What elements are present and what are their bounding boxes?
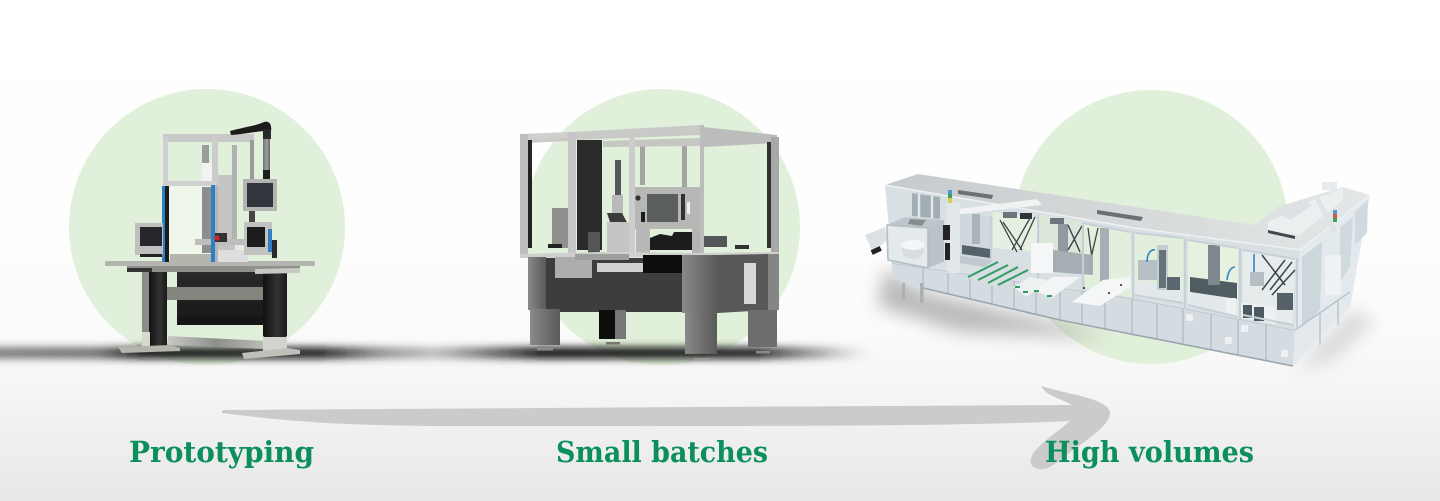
base cabinets <box>892 263 1295 366</box>
signal tower right <box>1315 197 1337 234</box>
right monitor <box>244 222 277 258</box>
machine base <box>528 254 779 313</box>
progress arrow <box>222 386 1110 469</box>
high volume line left shadow <box>878 268 1110 338</box>
window frames <box>958 211 1297 330</box>
rear left windows <box>912 193 940 219</box>
table plate <box>520 252 779 258</box>
green circle: prototyping <box>69 89 345 365</box>
feeder box <box>887 217 943 268</box>
high volume line right shadow <box>1296 308 1375 368</box>
label: Small batches: Small batches <box>556 435 768 469</box>
signal tower left <box>943 190 960 273</box>
equipment on table <box>636 228 727 253</box>
desk base <box>118 265 300 359</box>
label: High volumes: High volumes <box>1045 435 1254 469</box>
spindle <box>588 160 630 253</box>
front wall <box>885 185 1300 330</box>
left monitor <box>135 223 163 257</box>
roof edge highlight <box>885 185 1370 250</box>
control panel <box>633 187 700 229</box>
desk top <box>105 261 315 266</box>
label: Prototyping: Prototyping <box>129 435 314 469</box>
emergency stop button <box>214 233 227 242</box>
roof <box>885 174 1370 250</box>
green circle: small batches <box>524 89 800 365</box>
floor shadow band <box>0 347 870 359</box>
green circle: high volumes <box>1014 90 1288 364</box>
roof control strips <box>958 190 1143 221</box>
white carton stack <box>1031 243 1053 273</box>
support legs <box>902 283 924 303</box>
process windows <box>960 212 1295 325</box>
glass frame <box>162 134 255 262</box>
upper monitor <box>243 179 277 211</box>
left grey box <box>552 208 569 248</box>
prototyping workstation <box>105 122 315 359</box>
roof mounted unit <box>1268 182 1343 239</box>
dark tower <box>577 140 602 250</box>
fume extraction arm <box>230 122 271 223</box>
small batch machine <box>520 125 779 360</box>
white outfeed tray <box>1072 277 1130 306</box>
rear upper frame <box>528 127 777 188</box>
robot arm <box>950 199 1042 215</box>
feeder chute <box>865 227 887 255</box>
high volume production line <box>865 174 1370 366</box>
frame posts <box>520 125 779 256</box>
machine legs <box>530 309 777 360</box>
right side wall <box>1293 195 1370 366</box>
cabinet service labels <box>1186 314 1288 357</box>
green conveyors <box>965 258 1080 298</box>
